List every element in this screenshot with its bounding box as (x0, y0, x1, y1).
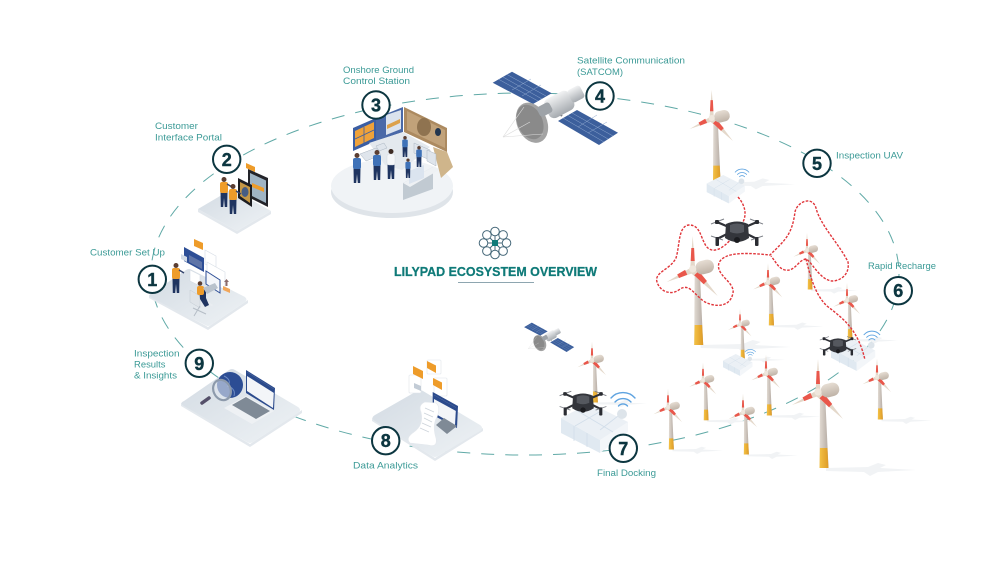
label: inspection results and insights: Inspection (134, 348, 180, 360)
label: onshore ground control station: Onshore Ground (343, 65, 414, 76)
label: inspection results and insights: & Insights (134, 370, 177, 382)
step 6 badge (885, 277, 912, 304)
turbine large left (667, 236, 791, 353)
step 7 badge: 7 (618, 439, 628, 459)
step 2 badge (213, 146, 240, 173)
step 4 badge (586, 82, 614, 110)
central heading block (394, 227, 597, 283)
label: customer interface portal (155, 121, 222, 144)
label: satellite communication (577, 56, 685, 78)
step 8 badge (372, 427, 399, 454)
illustration: customer set up (149, 239, 248, 330)
step 1 badge (139, 266, 166, 293)
label: satellite communication: Satellite Communication (577, 56, 685, 66)
step 6 badge: 6 (893, 281, 903, 301)
step 7 badge (610, 435, 637, 462)
step 2 badge: 2 (222, 150, 232, 170)
drone: final docking (560, 391, 606, 416)
step 9 badge (186, 350, 213, 377)
label: onshore ground control station (343, 65, 414, 87)
icon: lilypad logo (479, 227, 511, 259)
inspection flight path (657, 197, 865, 360)
step 1 badge: 1 (147, 270, 157, 290)
step 9 badge: 9 (194, 354, 204, 374)
label: inspection results and insights (134, 348, 180, 382)
title underline (458, 282, 534, 283)
illustration: satellite (493, 72, 618, 148)
turbine right of field (833, 283, 898, 344)
title: LILYPAD ECOSYSTEM OVERVIEW (394, 265, 597, 279)
label: onshore ground control station: Control Station (343, 76, 410, 87)
turbine by final dock (577, 342, 647, 407)
label: inspection uav: Inspection UAV (836, 150, 904, 162)
label: customer set up: Customer Set Up (90, 248, 165, 258)
label: final docking: Final Docking (597, 468, 656, 479)
label: customer interface portal: Interface Portal (155, 132, 222, 144)
turbine top (690, 90, 795, 189)
turbine upper loop (793, 233, 858, 294)
step 3 badge: 3 (371, 96, 381, 116)
turbine field (577, 90, 932, 476)
turbine front large (792, 359, 916, 476)
ecosystem loop dashed ellipse (151, 93, 899, 455)
step 5 badge: 5 (812, 154, 822, 174)
step 5 badge (803, 150, 831, 177)
small satellite (524, 323, 574, 353)
turbine row b (751, 355, 821, 420)
dock: small middle (723, 349, 756, 376)
illustration: inspection results and insights (181, 369, 302, 447)
turbine behind small dock (728, 309, 785, 363)
illustration: customer interface portal (198, 163, 271, 234)
drone: recharge (820, 337, 856, 356)
illustration: onshore ground control station (331, 107, 453, 218)
person standing (172, 263, 184, 293)
turbine row e (728, 394, 798, 459)
label: customer interface portal: Customer (155, 121, 199, 132)
label: inspection results and insights: Results (134, 360, 166, 370)
turbine row a (689, 363, 755, 425)
dock: top station (707, 169, 749, 204)
dock: recharge station (831, 331, 880, 371)
turbine row c (862, 359, 932, 424)
illustration: data analytics (372, 360, 483, 461)
label: satellite communication: (SATCOM) (577, 67, 623, 78)
step 8 badge: 8 (381, 431, 391, 451)
dock: final docking (561, 393, 635, 453)
drone: inspection (711, 219, 763, 246)
label: rapid recharge: Rapid Recharge (868, 261, 936, 272)
turbine mid (753, 263, 824, 330)
label: data analytics: Data Analytics (353, 460, 418, 472)
persons viewing tablets (220, 177, 241, 214)
turbine row d (653, 389, 723, 454)
step 4 badge: 4 (595, 86, 605, 106)
step 3 badge (362, 91, 390, 119)
operators (353, 136, 422, 183)
